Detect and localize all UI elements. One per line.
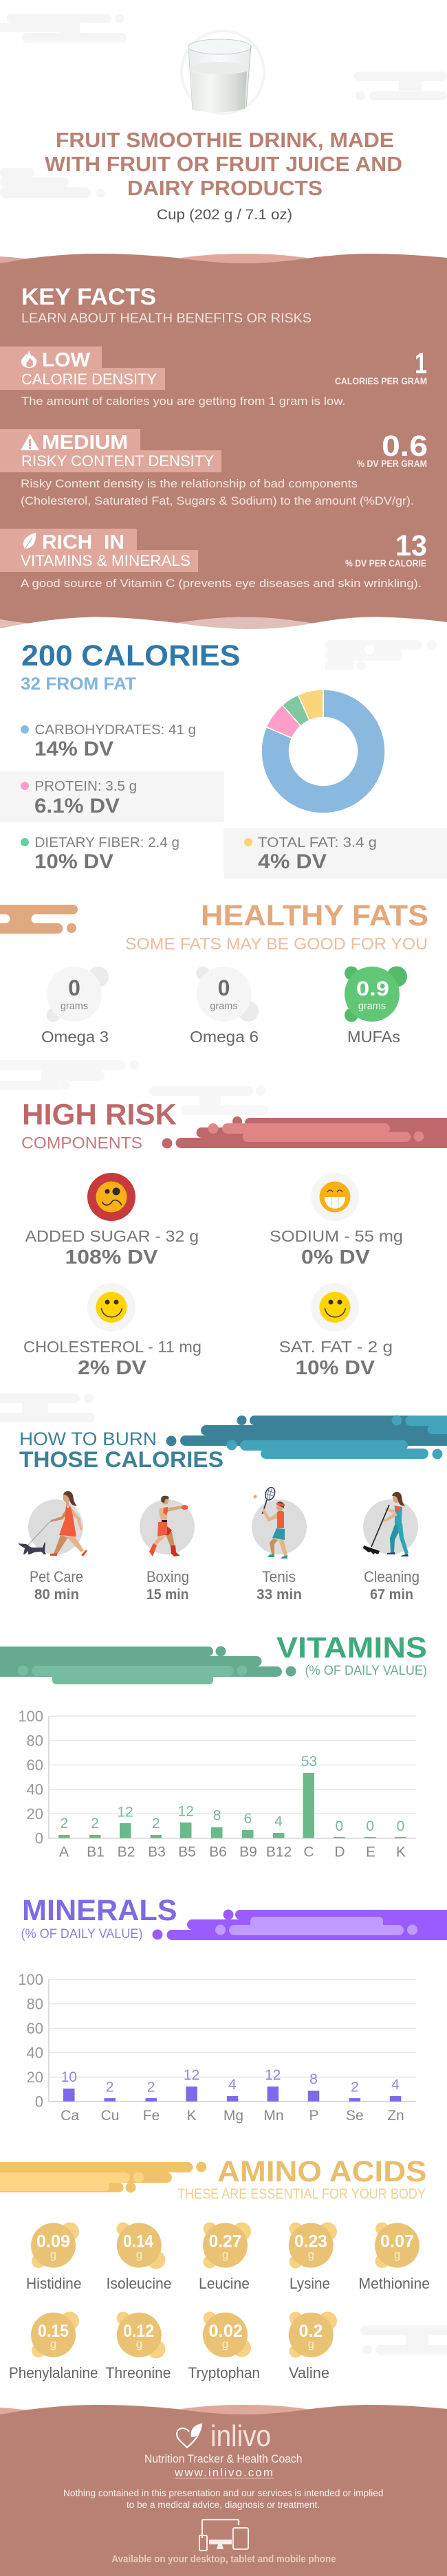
bar chart: minerals: P	[309, 2108, 319, 2124]
heading: how to burn: HOW TO BURN	[19, 1429, 157, 1449]
icon: boxer	[149, 1496, 188, 1556]
logo: inlivo	[177, 2419, 271, 2453]
amino: isoleucine	[106, 2222, 172, 2292]
heading: high risk: HIGH RISK	[22, 1099, 177, 1132]
tagline: Nutrition Tracker & Health Coach	[144, 2452, 303, 2465]
amino: lysine	[289, 2222, 337, 2292]
stat: mufas: grams	[358, 1001, 386, 1012]
panel: calories	[0, 639, 447, 879]
panel: healthy fats	[0, 899, 428, 1046]
stat: mufas: 0.9	[356, 978, 389, 1000]
subheading: from fat: 32 FROM FAT	[21, 674, 136, 694]
amino: tryptophan	[188, 2311, 260, 2381]
bar chart: vitamins: 12	[178, 1804, 194, 1820]
item: cholesterol	[23, 1283, 201, 1379]
activity: tennis	[252, 1486, 307, 1559]
stat: omega 3: Omega 3	[41, 1028, 109, 1046]
bar chart: vitamins: 12	[117, 1805, 133, 1820]
fact: rich in vitamins and minerals: 13	[395, 529, 427, 562]
amino: isoleucine: 0.14	[123, 2232, 153, 2252]
amino: lysine: Lysine	[290, 2275, 330, 2292]
decoration: purple band	[153, 1910, 447, 1940]
amino: tryptophan: 0.02	[209, 2322, 243, 2341]
amino: leucine	[199, 2222, 251, 2292]
fact: low calorie density: LOW	[42, 349, 91, 371]
bar chart: vitamins: 53	[301, 1754, 317, 1770]
heading: calories: 200 CALORIES	[21, 639, 241, 672]
stat: omega 6: 0	[218, 976, 230, 1000]
labels: activities: Pet Care	[30, 1568, 83, 1585]
bar chart: vitamins: B2	[118, 1845, 135, 1860]
bar chart: vitamins: 2	[152, 1816, 160, 1831]
amino: threonine: Threonine	[106, 2364, 171, 2381]
amino: histidine	[26, 2222, 81, 2292]
title: WITH FRUIT OR FRUIT JUICE AND	[45, 152, 402, 176]
legend: protein	[0, 771, 224, 822]
disclaimer: Nothing contained in this presentation and our services is intended or implied	[63, 2488, 384, 2498]
bar chart: vitamins: A	[59, 1845, 69, 1860]
amino: phenylalanine	[9, 2311, 98, 2381]
panel: key facts	[0, 254, 447, 629]
bar chart: minerals: Zn	[387, 2108, 404, 2124]
labels: activities: Boxing	[146, 1568, 189, 1585]
labels: activities	[30, 1568, 419, 1603]
bar chart: vitamins: 0	[366, 1818, 374, 1834]
amino: valine: 0.2	[298, 2322, 323, 2341]
bar chart: vitamins: 8	[213, 1808, 221, 1824]
panel: amino acids	[0, 2155, 447, 2381]
amino: methionine	[359, 2222, 430, 2292]
bar chart: vitamins: 2	[91, 1816, 99, 1831]
labels: activities: Tenis	[262, 1568, 296, 1585]
amino: phenylalanine: Phenylalanine	[9, 2364, 98, 2381]
amino: leucine: 0.27	[209, 2232, 242, 2252]
bar chart: minerals	[18, 1971, 416, 2124]
header	[0, 14, 447, 223]
item: added sugar	[25, 1173, 199, 1268]
bar chart: vitamins: 6	[243, 1811, 252, 1827]
icon: leaf	[23, 533, 36, 549]
amino: phenylalanine: g	[50, 2337, 56, 2351]
bar chart: minerals: 60	[27, 2020, 43, 2037]
bar chart: vitamins: K	[396, 1845, 406, 1860]
fact: rich in vitamins and minerals: A good source of Vitamin C (prevents eye diseases and skin wrinkling).	[21, 577, 422, 590]
heading: key facts: KEY FACTS	[21, 284, 156, 310]
bar chart: minerals: 8	[309, 2071, 318, 2087]
fact: medium risky content density: 0.6	[382, 430, 428, 463]
icon: woman walking dog	[18, 1491, 87, 1556]
fact: medium risky content density: Risky Content density is the relationship of bad components	[21, 477, 358, 490]
subheading: percent of daily value: (% OF DAILY VALUE)	[305, 1663, 427, 1678]
icon: smiling face	[96, 1292, 127, 1323]
bar chart: vitamins	[18, 1708, 416, 1860]
bar chart: vitamins: B6	[209, 1845, 227, 1860]
fact: medium risky content density: % DV PER GRAM	[357, 459, 427, 469]
icon: grinning face	[319, 1181, 351, 1213]
donut chart	[261, 690, 385, 813]
legend: carbohydrates: 14% DV	[34, 738, 113, 760]
legend: dietary fiber: DIETARY FIBER: 2.4 g	[34, 835, 179, 850]
amino: threonine: 0.12	[123, 2322, 154, 2341]
bar chart: minerals: Mg	[224, 2108, 243, 2124]
bar chart: minerals: 4	[228, 2077, 237, 2093]
website link: www.inlivo.com	[174, 2466, 273, 2479]
subheading: percent of daily value: (% OF DAILY VALUE)	[21, 1926, 143, 1941]
bar chart: minerals: 10	[61, 2069, 77, 2085]
logo: inlivo: inlivo	[210, 2419, 271, 2453]
legend: total fat: 4% DV	[258, 850, 327, 873]
bar chart: vitamins: B12	[266, 1845, 292, 1860]
bar chart: vitamins: B9	[239, 1845, 257, 1860]
heading: vitamins: VITAMINS	[276, 1631, 427, 1664]
labels: activities: 33 min	[257, 1587, 302, 1603]
disclaimer	[63, 2488, 384, 2510]
item: cholesterol: 2% DV	[78, 1357, 147, 1379]
fact: rich in vitamins and minerals: RICH IN	[42, 531, 124, 553]
item: added sugar: 108% DV	[65, 1246, 158, 1268]
heading: minerals: MINERALS	[22, 1894, 177, 1927]
heading: amino acids: AMINO ACIDS	[217, 2155, 426, 2188]
title: FRUIT SMOOTHIE DRINK, MADE	[56, 128, 394, 152]
fact: rich in vitamins and minerals: VITAMINS & MINERALS	[21, 552, 190, 569]
availability note: Available on your desktop, tablet and mobile phone	[111, 2554, 336, 2565]
bar chart: minerals: 12	[184, 2067, 199, 2083]
labels: activities: 15 min	[146, 1587, 188, 1603]
bar chart: minerals: K	[187, 2108, 197, 2124]
icon: devices	[199, 2520, 248, 2551]
decoration: yellow band	[0, 2161, 206, 2193]
bar chart: minerals: 0	[35, 2093, 43, 2111]
item: added sugar: ADDED SUGAR - 32 g	[25, 1227, 199, 1245]
disclaimer: to be a medical advice, diagnosis or treatment.	[127, 2500, 320, 2510]
bar chart: minerals: 20	[27, 2069, 43, 2086]
bar chart: vitamins: B3	[148, 1845, 166, 1860]
bar chart: minerals: 40	[27, 2045, 43, 2061]
stat: omega 6	[190, 967, 259, 1046]
footer	[0, 2405, 447, 2576]
labels: activities: 67 min	[370, 1587, 413, 1603]
amino: methionine: g	[394, 2248, 400, 2261]
bar chart: vitamins: 40	[27, 1781, 43, 1798]
legend: protein: PROTEIN: 3.5 g	[34, 778, 137, 794]
fact: low calorie density: The amount of calories you are getting from 1 gram is low.	[21, 395, 346, 408]
stat: mufas: MUFAs	[347, 1028, 400, 1046]
activity: pet care	[18, 1491, 87, 1556]
bar chart: minerals: Cu	[101, 2108, 119, 2124]
amino: methionine: Methionine	[359, 2275, 430, 2292]
amino: valine	[289, 2311, 337, 2381]
item: cholesterol: CHOLESTEROL - 11 mg	[23, 1338, 201, 1356]
item: saturated fat	[279, 1283, 393, 1379]
amino: valine: g	[308, 2337, 314, 2351]
legend: carbohydrates	[21, 722, 196, 760]
fact: rich in vitamins and minerals	[0, 529, 427, 590]
stat: omega 3: grams	[61, 1001, 88, 1012]
icon: unhappy face	[96, 1181, 127, 1213]
bar chart: vitamins: C	[303, 1845, 314, 1860]
bar chart: vitamins: 100	[18, 1708, 43, 1725]
bar chart: vitamins: B5	[178, 1845, 196, 1860]
bar chart: minerals: 100	[18, 1971, 43, 1988]
icon: heart with leaf	[177, 2423, 202, 2447]
title: DAIRY PRODUCTS	[127, 176, 323, 200]
bar chart: vitamins: E	[366, 1845, 375, 1860]
stat: mufas	[345, 967, 407, 1046]
fact: medium risky content density: MEDIUM	[42, 432, 128, 454]
decoration: teal band	[166, 1415, 447, 1459]
amino: histidine: 0.09	[36, 2232, 70, 2252]
amino: tryptophan: g	[222, 2337, 228, 2351]
panel: high risk	[0, 1060, 447, 1379]
bar chart: vitamins: 0	[35, 1830, 43, 1847]
bar chart: minerals: 2	[147, 2080, 155, 2095]
bar chart: minerals: 2	[351, 2080, 359, 2095]
amino: histidine: g	[50, 2248, 56, 2261]
amino: phenylalanine: 0.15	[38, 2322, 69, 2341]
fact: low calorie density: CALORIES PER GRAM	[335, 376, 427, 386]
fact: low calorie density: CALORIE DENSITY	[21, 371, 157, 388]
amino: methionine: 0.07	[380, 2232, 414, 2252]
item: saturated fat: SAT. FAT - 2 g	[279, 1338, 393, 1356]
item: sodium: SODIUM - 55 mg	[270, 1227, 403, 1245]
fact: rich in vitamins and minerals: % DV PER CALORIE	[345, 558, 426, 569]
bar chart: vitamins: 0	[336, 1818, 343, 1834]
fact: medium risky content density: RISKY CONTENT DENSITY	[21, 452, 214, 470]
stat: omega 3	[41, 967, 109, 1046]
item: sodium: 0% DV	[301, 1246, 371, 1268]
legend: total fat	[224, 828, 447, 879]
legend: carbohydrates: CARBOHYDRATES: 41 g	[34, 722, 196, 738]
stat: omega 6: grams	[210, 1001, 238, 1012]
legend: dietary fiber: 10% DV	[34, 850, 113, 873]
amino: threonine: g	[136, 2337, 142, 2351]
decoration: green band	[0, 1646, 296, 1684]
activity: cleaning	[363, 1492, 418, 1556]
decoration: red band	[162, 1116, 447, 1148]
bar chart: vitamins: 2	[60, 1816, 68, 1831]
panel: minerals	[18, 1894, 447, 2124]
amino: isoleucine: Isoleucine	[106, 2275, 172, 2292]
fact: low calorie density: 1	[415, 347, 427, 380]
bar chart: minerals: Ca	[61, 2108, 79, 2124]
heading: those calories: THOSE CALORIES	[19, 1447, 224, 1472]
bar chart: minerals: 2	[106, 2080, 113, 2095]
labels: activities: Cleaning	[364, 1568, 419, 1585]
labels: activities: 80 min	[34, 1587, 79, 1603]
amino: tryptophan: Tryptophan	[188, 2364, 260, 2381]
bar chart: vitamins: 0	[397, 1818, 404, 1834]
bar chart: vitamins: D	[334, 1845, 345, 1860]
subheading: components: COMPONENTS	[21, 1134, 142, 1152]
amino: leucine: g	[222, 2248, 228, 2261]
title	[45, 128, 402, 200]
amino: histidine: Histidine	[26, 2275, 81, 2292]
legend: protein: 6.1% DV	[34, 795, 120, 817]
icon: person with broom	[363, 1492, 408, 1556]
item: sodium	[270, 1173, 403, 1268]
amino: isoleucine: g	[136, 2248, 142, 2261]
fact: medium risky content density	[0, 429, 428, 507]
amino: lysine: g	[308, 2248, 314, 2261]
bar chart: minerals: 4	[391, 2077, 400, 2093]
bar chart: minerals: Se	[346, 2108, 364, 2124]
legend: dietary fiber	[21, 835, 179, 873]
decoration: orange band	[0, 905, 78, 934]
bar chart: vitamins: 4	[274, 1814, 283, 1829]
stat: omega 3: 0	[68, 976, 80, 1000]
subheading: LEARN ABOUT HEALTH BENEFITS OR RISKS	[21, 311, 312, 326]
amino: valine: Valine	[289, 2364, 329, 2381]
legend: total fat: TOTAL FAT: 3.4 g	[258, 835, 377, 850]
icon: glass of milk	[182, 31, 264, 113]
serving size: Cup (202 g / 7.1 oz)	[157, 207, 292, 223]
subheading: SOME FATS MAY BE GOOD FOR YOU	[125, 935, 428, 954]
bar chart: vitamins: 60	[27, 1757, 43, 1774]
amino: leucine: Leucine	[199, 2275, 250, 2292]
bar chart: vitamins: B1	[87, 1845, 105, 1860]
heading: healthy fats: HEALTHY FATS	[201, 899, 428, 932]
bar chart: minerals: 12	[265, 2067, 281, 2083]
icon: tennis player	[253, 1486, 287, 1559]
bar chart: minerals: 80	[27, 1995, 43, 2013]
bar chart: vitamins: 20	[27, 1805, 43, 1823]
fact: medium risky content density: (Cholesterol, Saturated Fat, Sugars & Sodium) to the amount (%DV/gr).	[21, 494, 414, 507]
item: saturated fat: 10% DV	[296, 1357, 375, 1379]
bar chart: minerals: Fe	[143, 2108, 160, 2124]
panel: vitamins	[0, 1631, 427, 1860]
stat: omega 6: Omega 6	[190, 1028, 259, 1046]
amino: threonine	[106, 2311, 171, 2381]
amino: lysine: 0.23	[294, 2232, 327, 2252]
bar chart: minerals: Mn	[263, 2108, 284, 2124]
fact: low calorie density	[0, 346, 427, 408]
panel: burn calories	[0, 1394, 447, 1603]
activity: boxing	[140, 1496, 195, 1556]
icon: smiling face	[319, 1292, 351, 1323]
bar chart: vitamins: 80	[27, 1732, 43, 1749]
icon: warning triangle	[21, 434, 39, 450]
icon: flame	[21, 351, 36, 368]
